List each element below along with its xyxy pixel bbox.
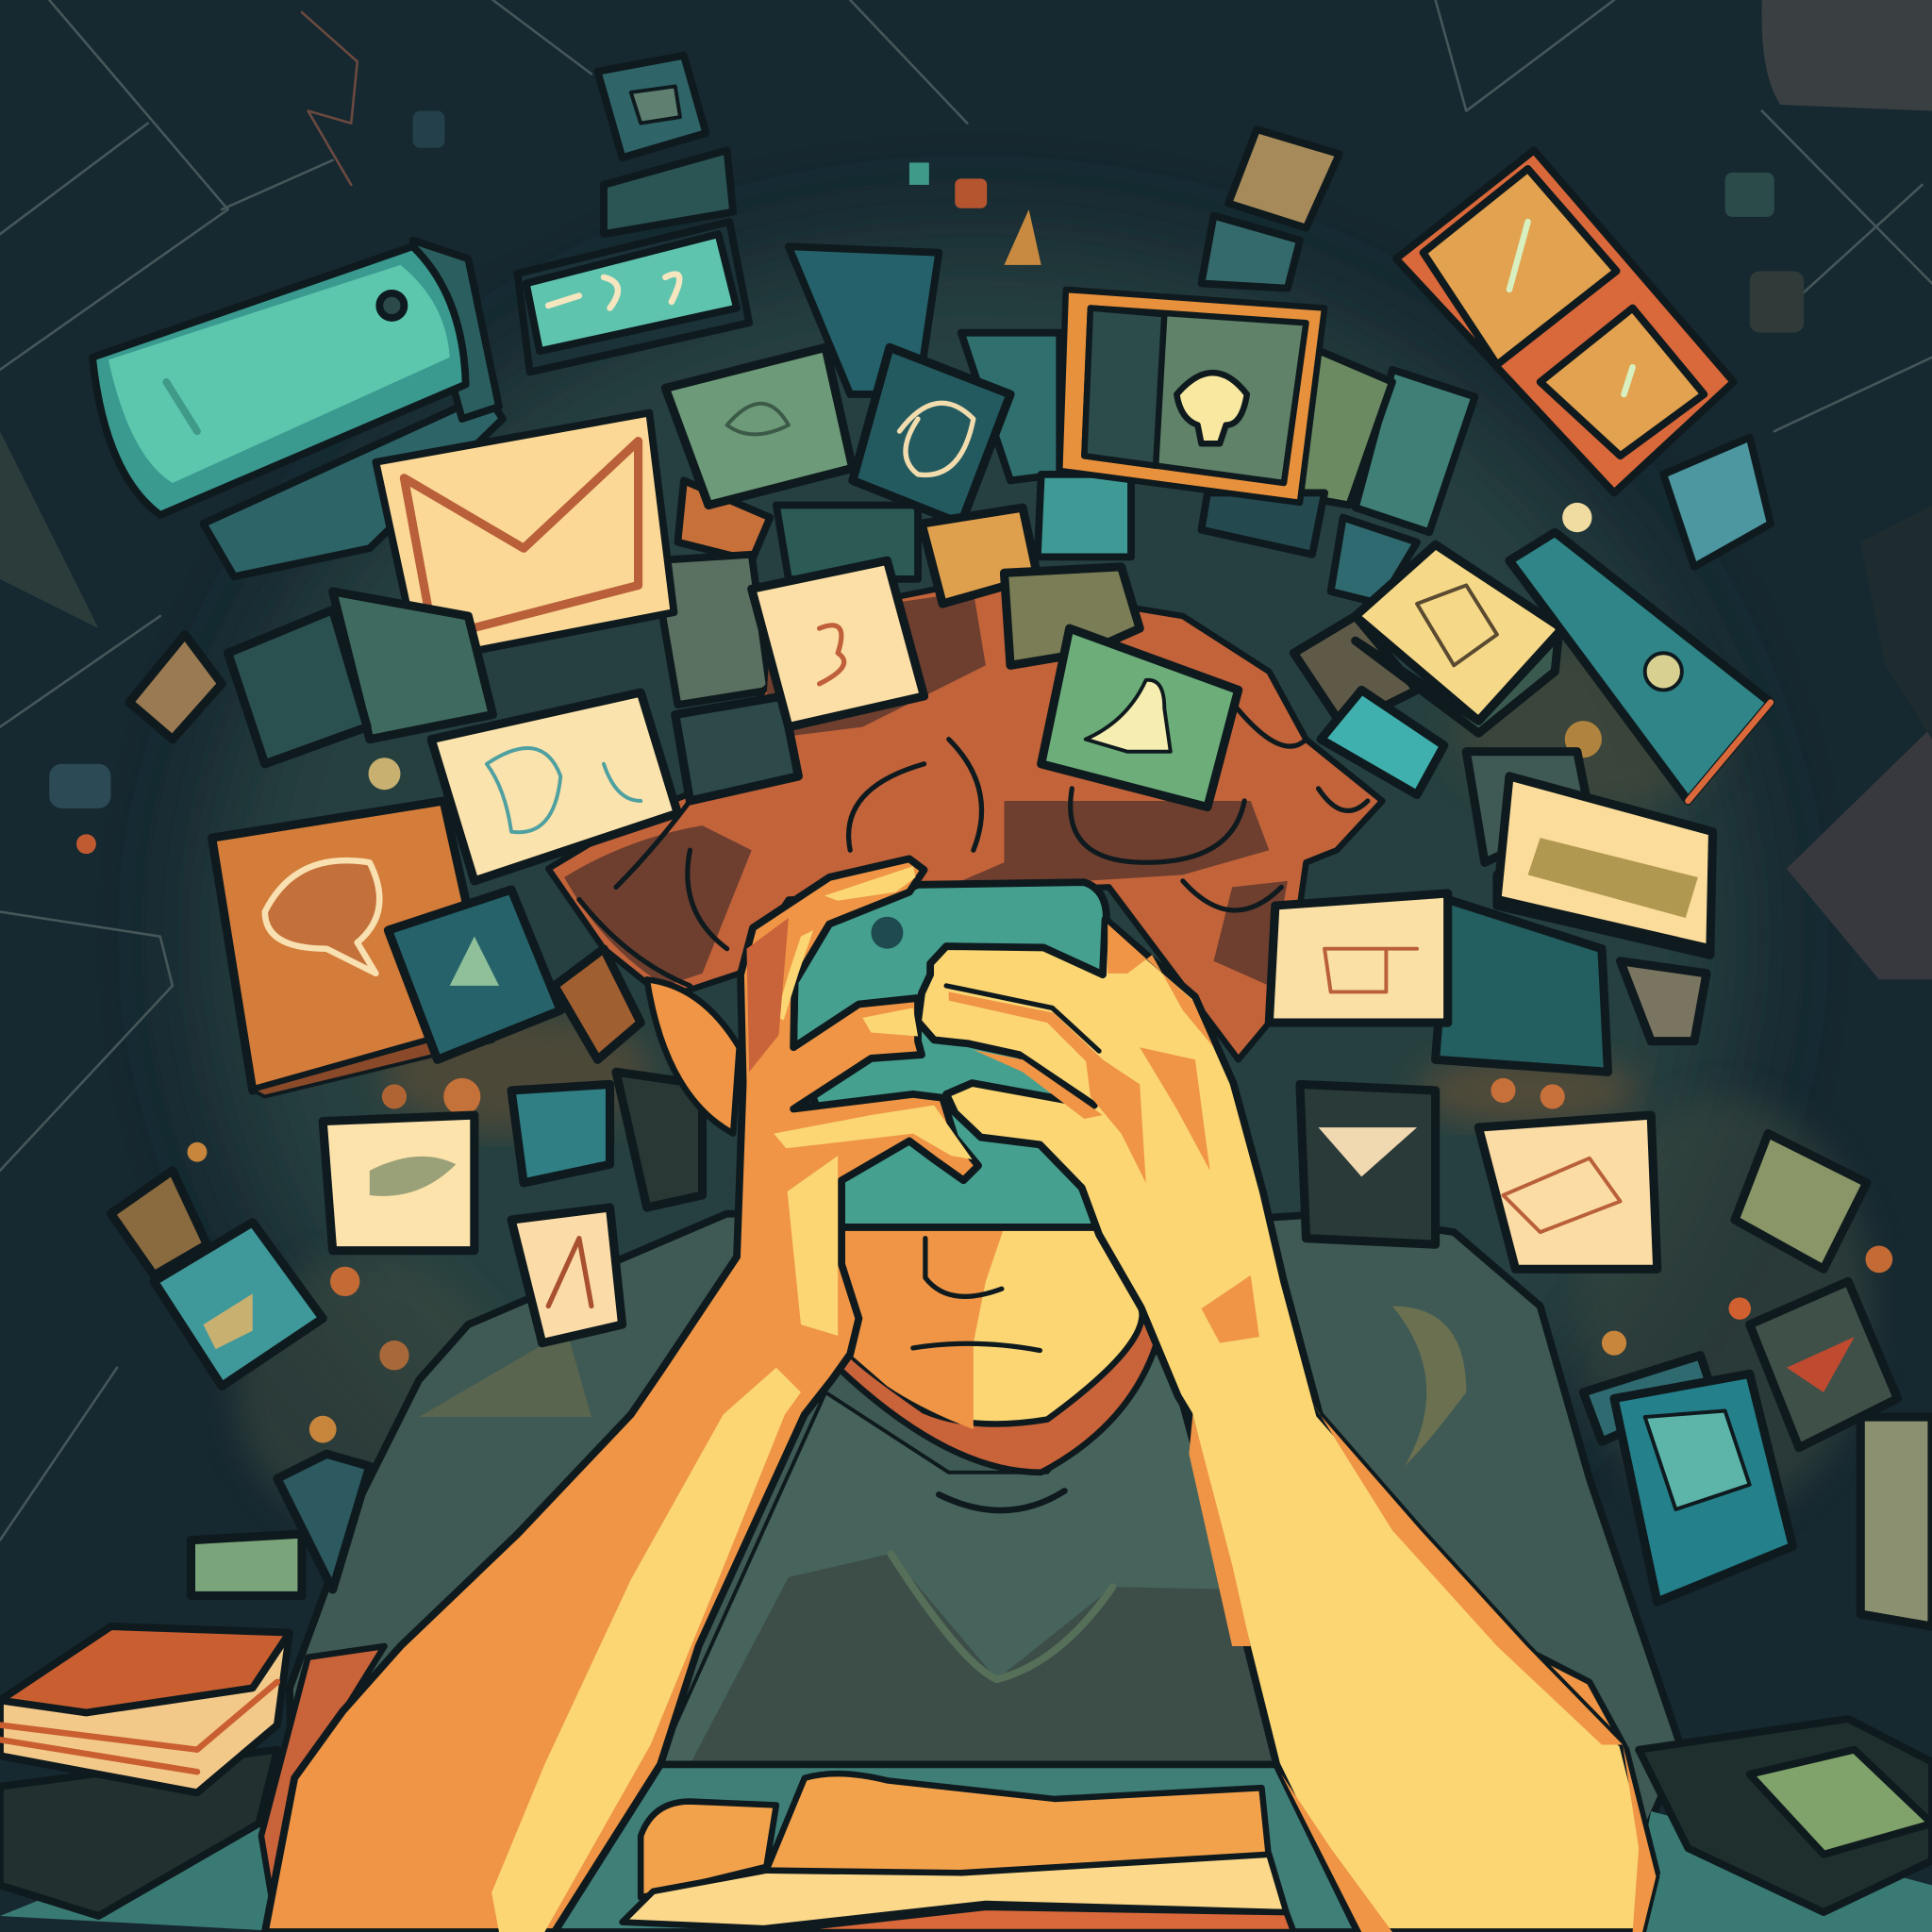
speckles <box>49 111 1892 1442</box>
back icons: top row <box>597 56 1474 705</box>
icon: wide teal phone <box>518 222 749 372</box>
corner shapes <box>0 0 1932 979</box>
sleeves <box>261 1646 1657 1932</box>
icon: central framed square <box>1059 290 1324 503</box>
ear <box>647 979 740 1134</box>
front icons: right cluster <box>1269 532 1932 1626</box>
neck <box>838 1293 1164 1473</box>
icons: green and teal squares <box>665 347 1010 524</box>
left arm and hand <box>265 858 978 1932</box>
icon: thumbs up <box>1041 628 1239 808</box>
right arm and hand <box>918 919 1656 1932</box>
desk <box>0 1764 1932 1932</box>
hair <box>548 579 1382 1059</box>
front icons: left cluster <box>129 508 1140 1096</box>
shirt <box>290 1214 1682 1932</box>
books: lower left <box>0 1626 290 1916</box>
phone <box>793 882 1107 1227</box>
icon: small blue card <box>1663 438 1771 567</box>
icon: envelope <box>375 413 674 661</box>
open book <box>623 1774 1293 1932</box>
icon: orange phone <box>1396 150 1734 492</box>
front icons: lower left cluster <box>111 1072 702 1595</box>
tablet: lower right <box>1639 1719 1932 1912</box>
icon: large teal phone <box>92 241 503 576</box>
face <box>841 1227 1142 1429</box>
